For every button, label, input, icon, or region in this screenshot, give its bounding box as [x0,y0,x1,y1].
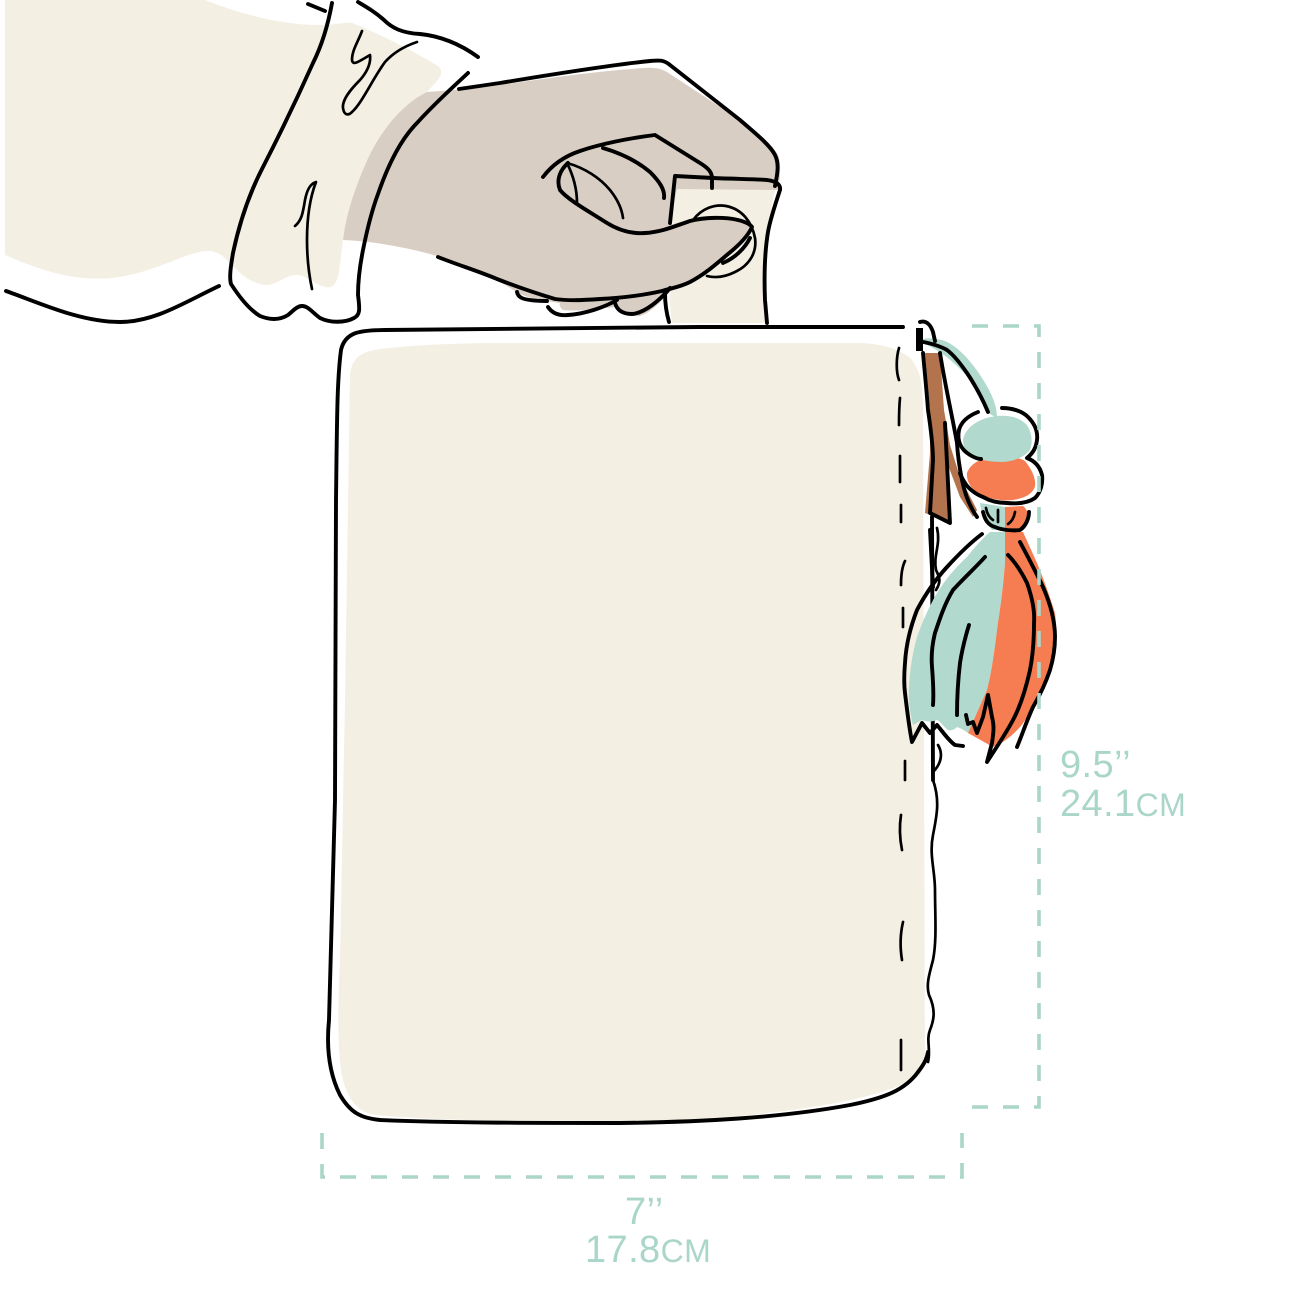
hand fill [343,68,780,316]
width label: 7’’ [625,1191,664,1233]
notebook outline [328,327,941,1123]
stitching dashes [897,348,905,1070]
height label: 24.1CM [1060,783,1186,825]
notebook cover fill [338,343,925,1122]
arm and sleeve fill [5,0,441,287]
height label [1060,744,1186,825]
width label [585,1191,711,1271]
width dimension bracket [322,1133,962,1177]
height label: 9.5’’ [1060,744,1131,786]
card tab outline [665,176,780,323]
grommet on card [693,206,755,277]
tassel skirt fill [909,503,1056,747]
height dimension bracket [971,326,1039,1107]
hand outline [438,60,778,315]
sleeve cuff outline [6,2,478,322]
hand redraw over card [600,218,752,291]
width label: 17.8CM [585,1229,711,1271]
tassel cord [917,338,997,418]
tassel and strap outlines [904,322,1055,762]
card tab fill [670,189,775,323]
brown leather strap fill [925,353,977,522]
tassel balls fill [963,416,1035,500]
